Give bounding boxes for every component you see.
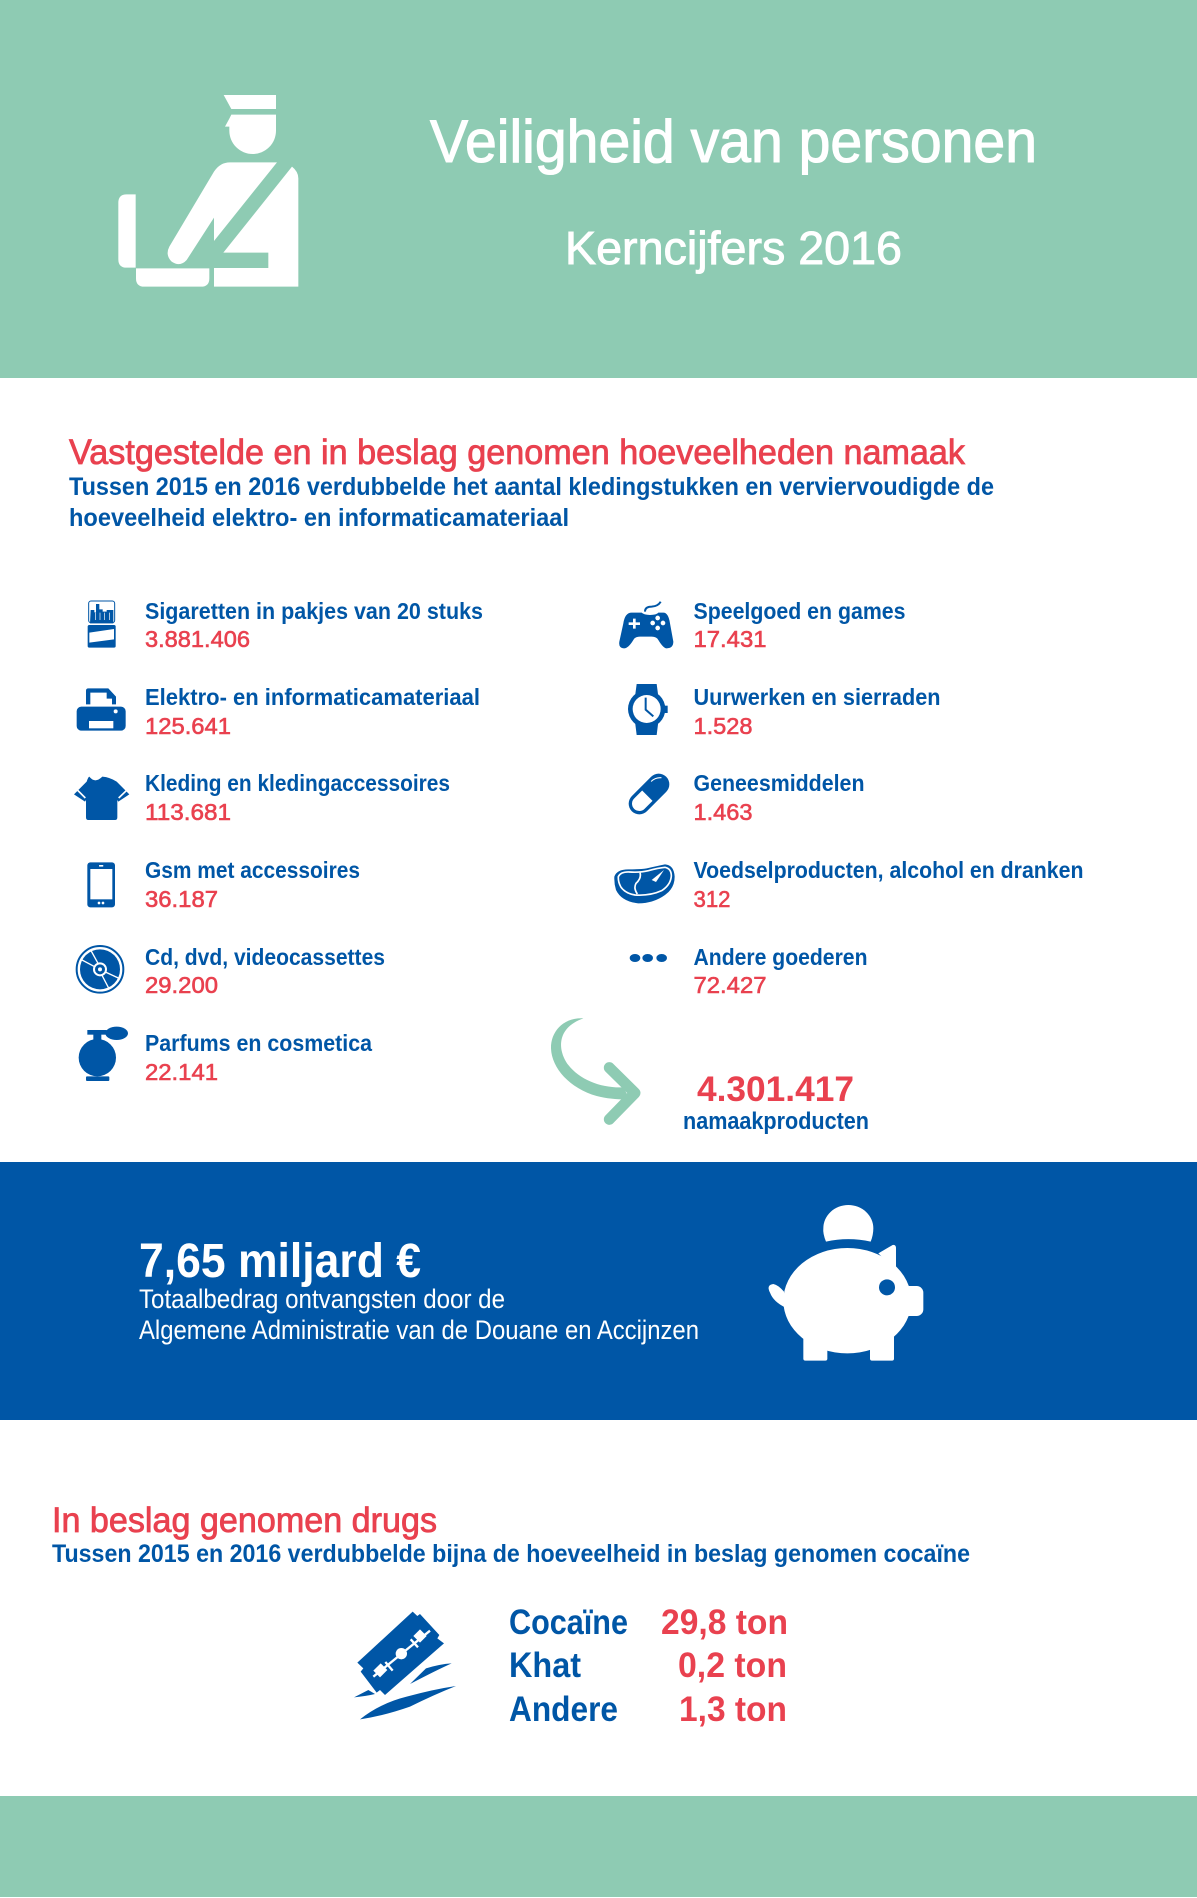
item: toys: Speelgoed en games: [694, 598, 906, 624]
drug table: 29,8 ton: [661, 1603, 788, 1642]
item: other goods: [630, 944, 868, 998]
item: perfume: 22.141: [145, 1059, 218, 1085]
text block: drugs intro: Tussen 2015 en 2016 verdubbelde bijna de hoeveelheid in beslag genomen cocaïne: [52, 1540, 970, 1568]
icon: customs officer: [118, 95, 298, 287]
item: toys: 17.431: [694, 626, 766, 652]
item: discs: [77, 944, 385, 998]
item: medicines: Geneesmiddelen: [694, 770, 864, 796]
item: medicines: [624, 769, 864, 825]
footer band: [0, 1796, 1197, 1897]
item: watches: [628, 684, 940, 739]
icon: cigarette pack: [88, 601, 116, 648]
panel: header: [0, 0, 1197, 378]
heading: counterfeit: Vastgestelde en in beslag genomen hoeveelheden namaak: [69, 433, 965, 472]
text block: counterfeit intro: Tussen 2015 en 2016 verdubbelde het aantal kledingstukken en verviervoudigde de: [69, 473, 994, 501]
text block: counterfeit intro: hoeveelheid elektro- en informaticamateriaal: [69, 504, 569, 532]
item: electronics: [77, 684, 480, 739]
item: phones: 36.187: [145, 886, 218, 912]
item: toys: [619, 598, 906, 652]
heading: drugs: In beslag genomen drugs: [52, 1501, 437, 1540]
arrow: [551, 1018, 635, 1119]
item: electronics: Elektro- en informaticamateriaal: [145, 684, 480, 710]
item: cigarettes: Sigaretten in pakjes van 20 stuks: [145, 598, 483, 624]
icon: pill: [624, 769, 674, 819]
drug table: [509, 1603, 788, 1729]
item: other goods: 72.427: [694, 972, 766, 998]
panel: counterfeit goods: [69, 433, 1084, 1135]
icon: three dots: [630, 954, 667, 962]
item: phones: [87, 857, 360, 912]
icon: smartphone: [87, 862, 115, 907]
panel: seized drugs: [52, 1501, 970, 1729]
item: food: 312: [694, 886, 730, 912]
total counterfeit: [683, 1070, 869, 1135]
item: perfume: Parfums en cosmetica: [145, 1030, 372, 1056]
icon: printer: [77, 688, 126, 731]
subtitle: Kerncijfers 2016: [565, 222, 902, 274]
total counterfeit: 4.301.417: [697, 1070, 854, 1109]
icon: razor blade: [354, 1612, 456, 1719]
item: cigarettes: [88, 598, 483, 652]
item: medicines: 1.463: [694, 799, 752, 825]
drug table: Khat: [509, 1646, 581, 1685]
panel: customs revenue: [0, 1162, 1197, 1420]
item: clothing: 113.681: [145, 799, 231, 825]
icon: watch: [628, 684, 668, 735]
icon: t-shirt: [74, 777, 129, 820]
item: watches: Uurwerken en sierraden: [694, 684, 940, 710]
revenue description: Totaalbedrag ontvangsten door de: [139, 1284, 505, 1314]
drug table: 0,2 ton: [678, 1646, 787, 1685]
item: discs: 29.200: [145, 972, 218, 998]
drug table: Andere: [509, 1690, 618, 1729]
icon: steak: [614, 864, 675, 903]
item: clothing: Kleding en kledingaccessoires: [145, 770, 450, 796]
item: food: Voedselproducten, alcohol en dranken: [694, 857, 1084, 883]
revenue figure: 7,65 miljard €: [139, 1235, 421, 1288]
item: phones: Gsm met accessoires: [145, 857, 360, 883]
item: cigarettes: 3.881.406: [145, 626, 250, 652]
icon: game controller: [619, 602, 673, 648]
drug table: 1,3 ton: [679, 1690, 787, 1729]
item: watches: 1.528: [694, 713, 752, 739]
text block: counterfeit intro: [69, 473, 994, 532]
title: Veiligheid van personen: [430, 108, 1037, 175]
revenue description: Algemene Administratie van de Douane en Accijnzen: [139, 1315, 699, 1345]
item: clothing: [74, 770, 450, 825]
icon: piggy bank: [769, 1205, 923, 1361]
icon: perfume bottle: [79, 1027, 128, 1081]
icon: compact disc: [77, 946, 123, 993]
item: other goods: Andere goederen: [694, 944, 868, 970]
item: discs: Cd, dvd, videocassettes: [145, 944, 385, 970]
item: electronics: 125.641: [145, 713, 231, 739]
total counterfeit: namaakproducten: [683, 1108, 869, 1135]
item: food: [614, 857, 1084, 912]
revenue description: [139, 1284, 699, 1345]
drug table: Cocaïne: [509, 1603, 628, 1642]
item: perfume: [79, 1027, 372, 1085]
